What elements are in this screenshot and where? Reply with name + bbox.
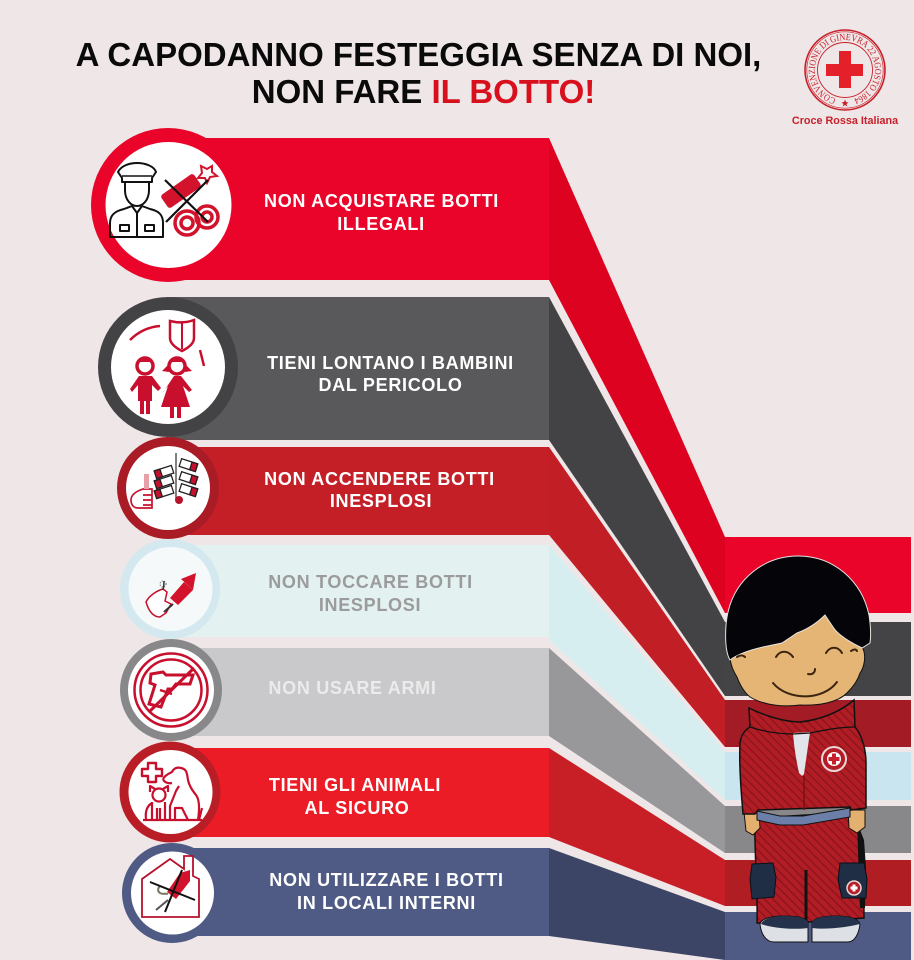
text: tieni gli animali al sicuro: TIENI GLI ANIMALI (269, 775, 441, 795)
text: non toccare botti inesplosi: NON TOCCARE BOTTI (268, 572, 473, 592)
band 7: navy (122, 843, 911, 960)
text: tieni gli animali al sicuro (269, 775, 441, 818)
text: non toccare botti inesplosi (268, 572, 473, 615)
logo: Croce Rossa Italiana (792, 29, 899, 127)
text: non usare armi: NON USARE ARMI (268, 678, 437, 698)
logo: Croce Rossa Italiana: Croce Rossa Italiana (792, 115, 899, 127)
icon: no weapons (134, 654, 208, 726)
title (76, 36, 761, 110)
face (730, 612, 865, 706)
right pocket (838, 863, 867, 898)
character: smiling volunteer (726, 556, 871, 942)
text: non acquistare botti illegali (264, 191, 499, 234)
icon: hand lighting rocket (146, 573, 196, 617)
left pocket (750, 863, 776, 899)
band 5: grey (120, 639, 911, 853)
text: tieni lontano i bambini: DAL PERICOLO (318, 375, 463, 395)
shoes (760, 916, 860, 942)
title: NON FARE IL BOTTO! (252, 73, 595, 110)
band 2: dark grey (98, 297, 911, 696)
text: non accendere botti inesplosi (264, 469, 495, 511)
logo: Croce Rossa Italiana: CONVENZIONE DI GINEVRA 22 AGOSTO 1864 (808, 34, 882, 104)
icon: children and shield (130, 320, 204, 418)
text: tieni gli animali al sicuro: AL SICURO (305, 798, 409, 818)
hands (744, 810, 865, 835)
text: tieni lontano i bambini (267, 353, 514, 395)
jacket badge (822, 747, 846, 771)
text: non utilizzare i botti in locali interni (269, 870, 504, 913)
shirt (793, 732, 810, 776)
band 4: pale blue (120, 539, 911, 800)
jacket (740, 700, 866, 814)
hair (726, 556, 871, 660)
icon: firecracker string and hand (131, 453, 198, 508)
icon: police officer with banned firecrackers (110, 163, 218, 237)
icon: house with banned rocket (142, 856, 199, 917)
band 3: crimson (117, 437, 911, 747)
text: non utilizzare i botti in locali interni: IN LOCALI INTERNI (297, 893, 476, 913)
eyes, nose and mouth (737, 648, 857, 696)
text: non acquistare botti illegali: NON ACQUISTARE BOTTI (264, 191, 499, 211)
text: non accendere botti inesplosi: NON ACCENDERE BOTTI (264, 469, 495, 489)
band 6: bright red (120, 742, 911, 906)
text: tieni lontano i bambini: TIENI LONTANO I BAMBINI (267, 353, 514, 373)
text: non utilizzare i botti in locali interni: NON UTILIZZARE I BOTTI (269, 870, 504, 890)
text: non toccare botti inesplosi: INESPLOSI (319, 595, 421, 615)
title: A CAPODANNO FESTEGGIA SENZA DI NOI, (76, 36, 761, 73)
band 1: red (91, 128, 911, 613)
belt (757, 808, 850, 825)
text: non acquistare botti illegali: ILLEGALI (337, 214, 425, 234)
text: non accendere botti inesplosi: INESPLOSI (330, 491, 432, 511)
trousers (755, 812, 864, 923)
icon: pets and red cross (142, 763, 202, 820)
